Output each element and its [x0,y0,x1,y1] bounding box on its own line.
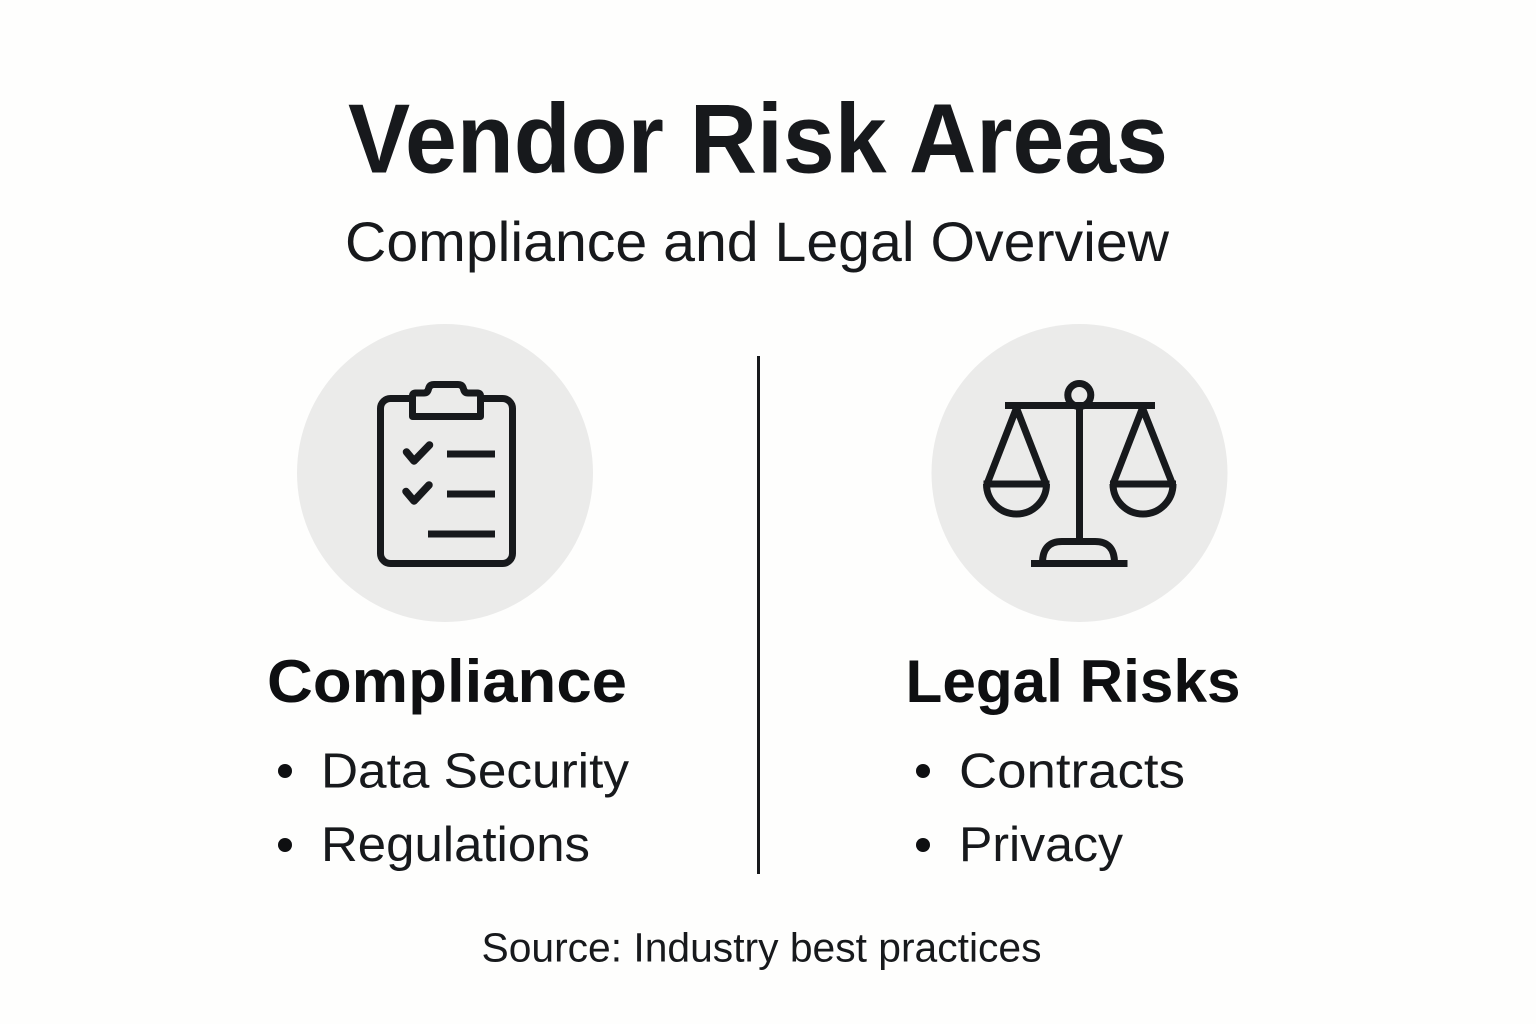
title: Vendor Risk Areas [348,84,1168,194]
heading: compliance: Compliance [267,648,627,715]
list: legal items: Privacy [959,818,1124,872]
icon: clipboard checklist [297,324,593,622]
heading: legal risks: Legal Risks [906,648,1240,715]
divider [757,356,760,874]
list: compliance items: Data Security [321,744,630,798]
list: compliance items [278,744,630,872]
subtitle: Compliance and Legal Overview [345,210,1170,273]
source note: Source: Industry best practices [482,924,1042,970]
panel: compliance [267,324,630,872]
list: legal items [916,744,1185,872]
panel: legal risks [906,324,1240,872]
list: legal items: Contracts [959,744,1185,798]
list: compliance items: Regulations [321,818,590,872]
icon: balance scales [932,324,1228,622]
